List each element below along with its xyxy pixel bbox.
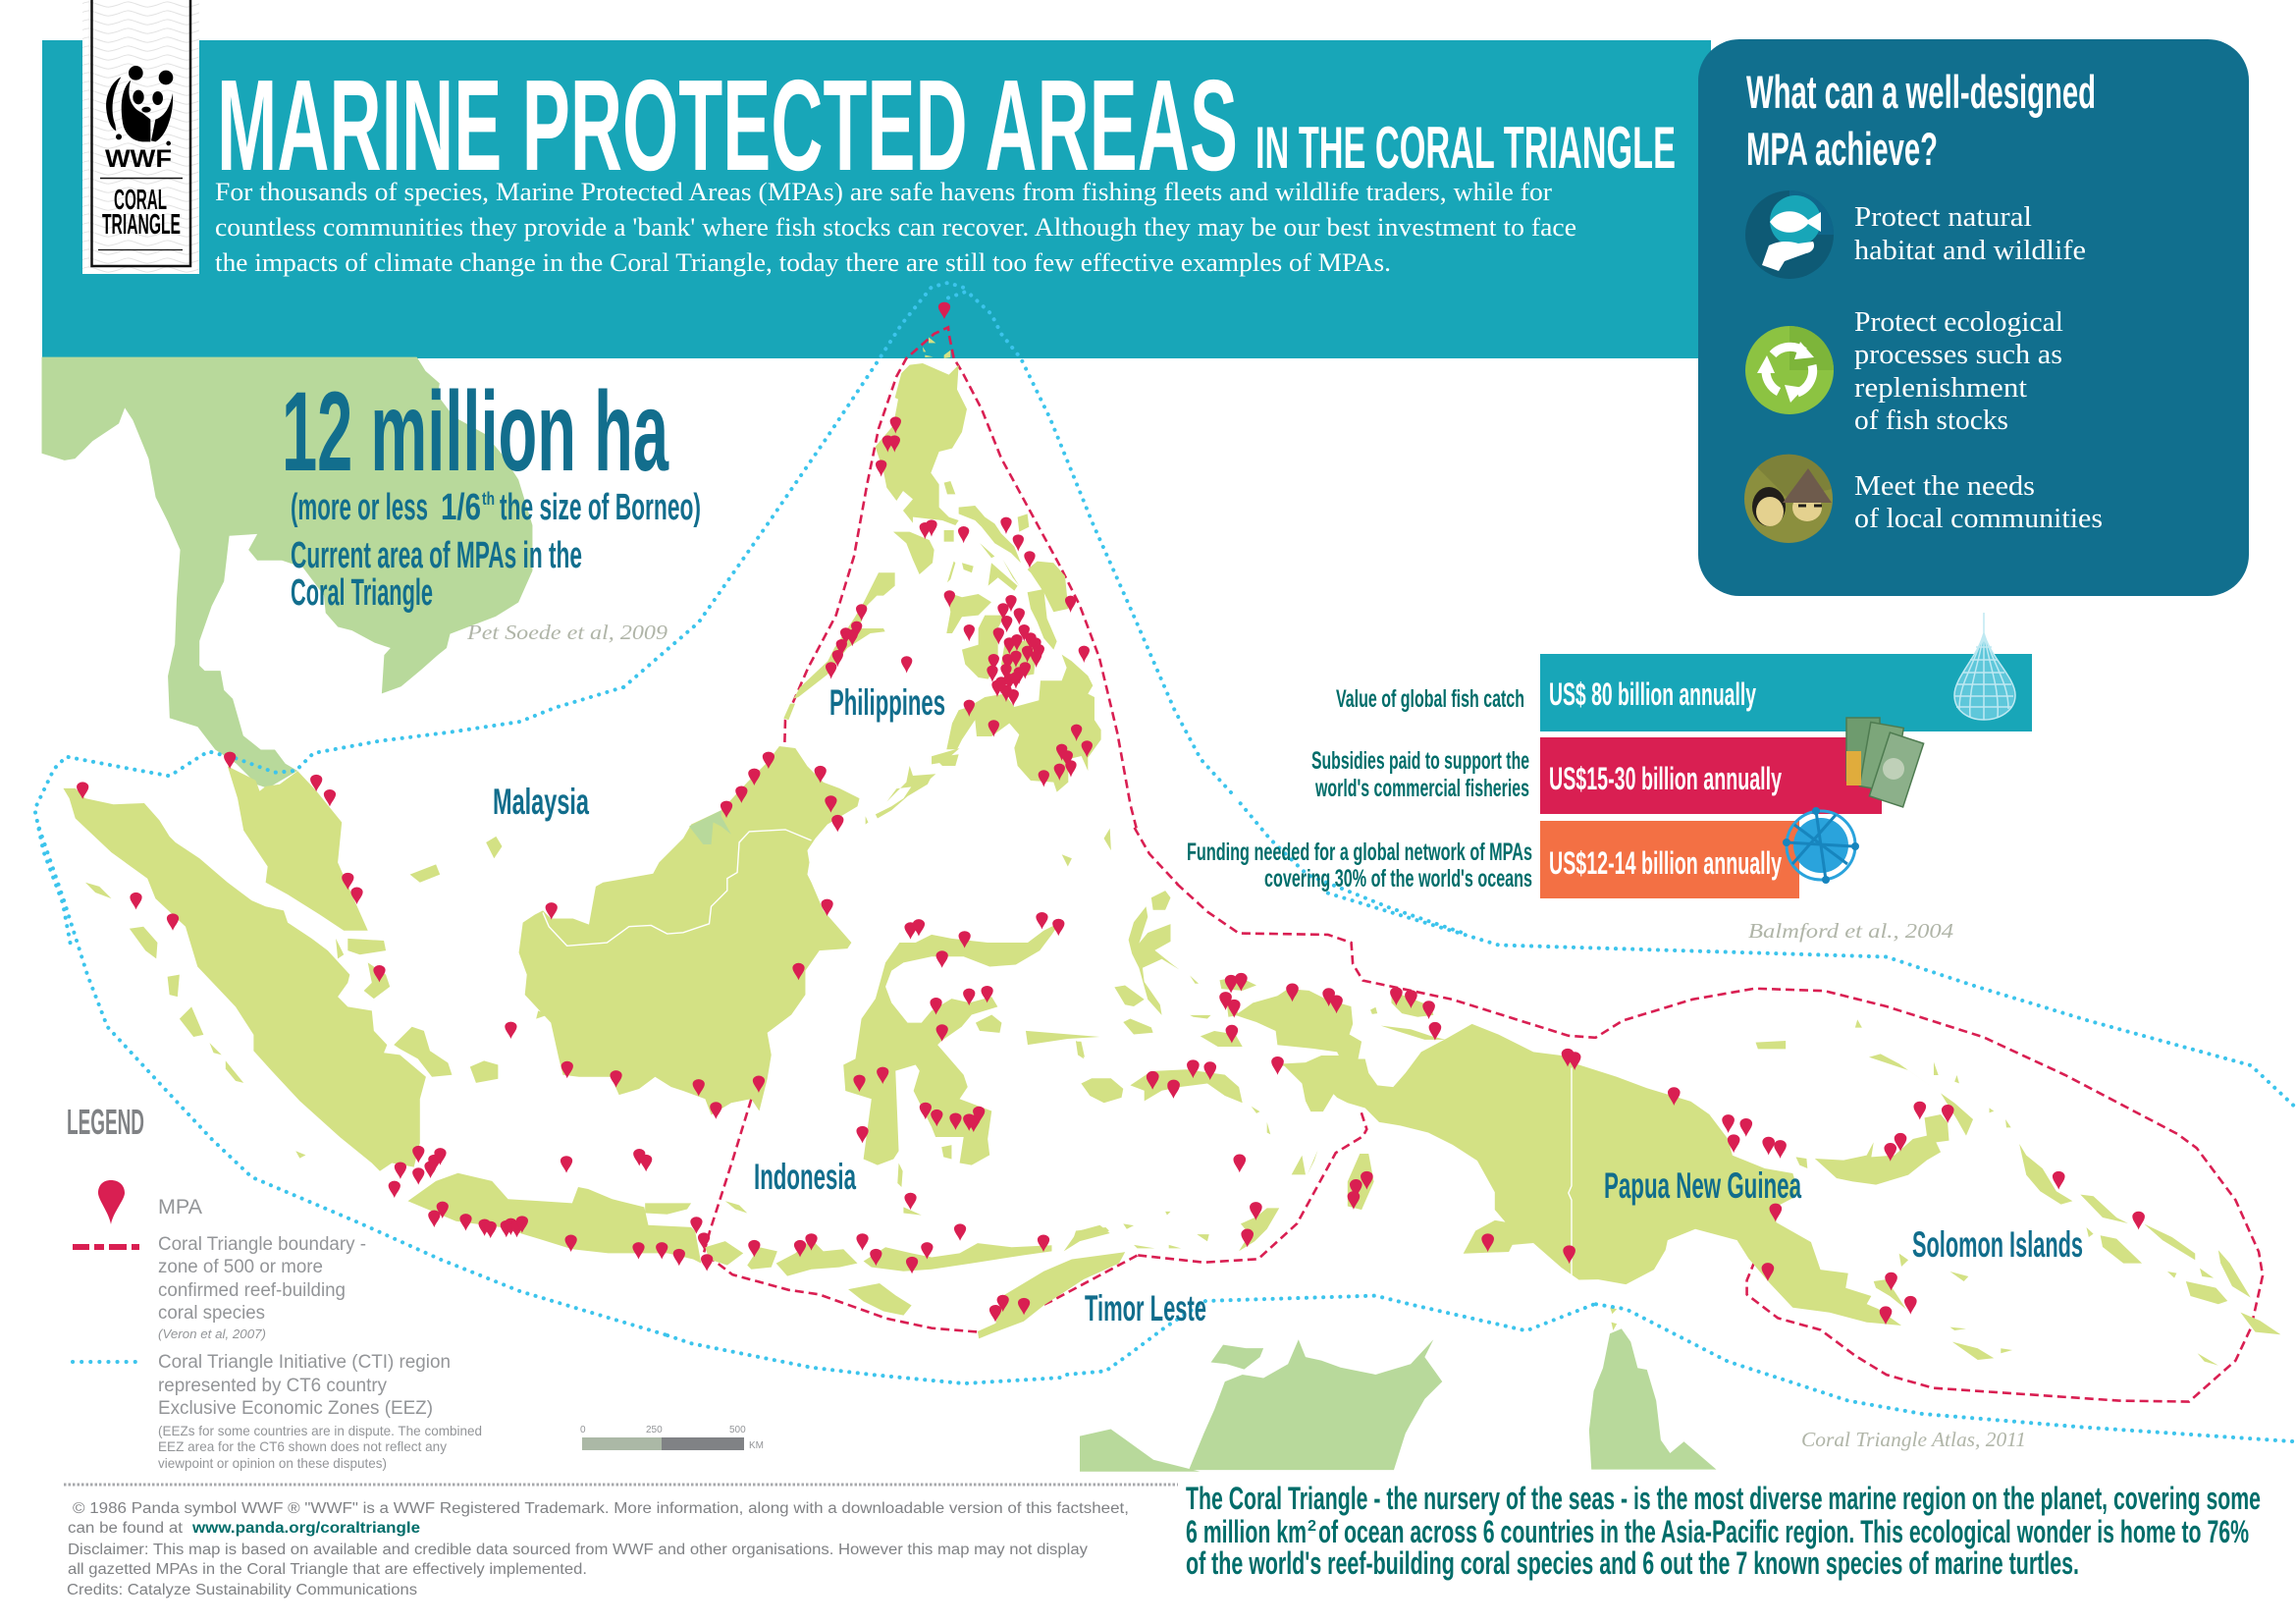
legend pin bbox=[98, 1180, 125, 1224]
text: protect ecological processes: Protect ecological bbox=[1854, 307, 2063, 338]
MPA location pins bbox=[77, 302, 2145, 1325]
legend text: Coral Triangle boundary bbox=[158, 1234, 366, 1341]
legend text: CTI region: (EEZs for some countries are in dispute. The combined bbox=[158, 1423, 482, 1438]
country labels: Papua New Guinea bbox=[1604, 1165, 1801, 1206]
country labels: Malaysia bbox=[493, 782, 589, 822]
scale bar: 500 bbox=[729, 1425, 746, 1435]
Coral Triangle boundary line bbox=[704, 327, 2263, 1402]
legend text: CTI region: EEZ area for the CT6 shown does not reflect any bbox=[158, 1438, 447, 1454]
bar values bbox=[1549, 677, 1782, 881]
bar values: US$15-30 billion annually bbox=[1549, 761, 1782, 796]
legend text: Coral Triangle boundary: (Veron et al, 2007) bbox=[158, 1326, 266, 1341]
text: protect habitat: Protect natural bbox=[1854, 202, 2032, 233]
statistic: 12 million ha: Current area of MPAs in the bbox=[291, 535, 582, 576]
title: IN THE CORAL TRIANGLE bbox=[1255, 115, 1676, 181]
icon: globe network bbox=[1783, 807, 1859, 884]
text: protect ecological processes: processes such as bbox=[1854, 340, 2062, 370]
scale bar: 250 bbox=[646, 1425, 663, 1435]
country labels bbox=[493, 682, 2083, 1328]
legend text: Coral Triangle boundary: confirmed reef-building bbox=[158, 1280, 346, 1301]
country labels: Indonesia bbox=[754, 1157, 856, 1197]
legend label: MPA: MPA bbox=[158, 1196, 202, 1218]
icon: replenishment cycle bbox=[1745, 326, 1834, 414]
source: Pet Soede: Pet Soede et al, 2009 bbox=[466, 621, 668, 644]
footer credits: all gazetted MPAs in the Coral Triangle that are effectively implemented. bbox=[68, 1561, 587, 1578]
closing statement bbox=[1186, 1481, 2261, 1581]
footer credits: © 1986 Panda symbol WWF ® "WWF" is a WWF Registered Trademark. More information, along with a downloadable version of this factsheet, bbox=[73, 1500, 1129, 1517]
text: Coral Triangle bbox=[102, 185, 181, 241]
map: Indonesia, Malaysia and Philippines islands bbox=[63, 337, 2280, 1366]
text: meet needs of communities: Meet the needs bbox=[1854, 471, 2035, 502]
legend text: Coral Triangle boundary: zone of 500 or more bbox=[158, 1257, 323, 1277]
statistic: 12 million ha bbox=[282, 369, 701, 614]
footer credits: can be found at bbox=[68, 1520, 184, 1537]
WWF Coral Triangle logo bbox=[82, 0, 199, 274]
legend bbox=[67, 1102, 482, 1471]
scale bar: 0 bbox=[580, 1425, 586, 1435]
bar values: US$ 80 billion annually bbox=[1549, 677, 1756, 712]
country labels: Timor Leste bbox=[1085, 1288, 1206, 1328]
source: Balmford: Balmford et al., 2004 bbox=[1748, 919, 1954, 943]
panel heading bbox=[1746, 66, 2096, 175]
title: MARINE PROTECTED AREAS bbox=[217, 53, 1238, 197]
intro paragraph: the impacts of climate change in the Coral Triangle, today there are still too few effective examples of MPAs. bbox=[215, 248, 1391, 277]
legend text: CTI region: represented by CT6 country bbox=[158, 1376, 387, 1396]
text: meet needs of communities: of local communities bbox=[1854, 504, 2103, 534]
bar labels: Subsidies paid to support the bbox=[1311, 747, 1529, 775]
text: protect habitat: habitat and wildlife bbox=[1854, 236, 2086, 266]
legend text: CTI region: Exclusive Economic Zones (EEZ) bbox=[158, 1398, 433, 1419]
legend text: CTI region bbox=[158, 1352, 482, 1471]
legend text: Coral Triangle boundary: coral species bbox=[158, 1303, 265, 1324]
text: protect ecological processes bbox=[1854, 307, 2063, 436]
text: protect habitat bbox=[1854, 202, 2086, 266]
bar: MPA funding bbox=[1540, 821, 1799, 898]
statistic: 12 million ha: (more or less bbox=[291, 487, 428, 528]
icon: hand holding fish bbox=[1745, 190, 1834, 279]
legend text: CTI region: viewpoint or opinion on these disputes) bbox=[158, 1455, 387, 1471]
bar labels: covering 30% of the world's oceans bbox=[1264, 865, 1532, 893]
statistic: 12 million ha: 12 million ha bbox=[282, 369, 669, 495]
bar: subsidies bbox=[1540, 737, 1882, 814]
closing statement: 2 bbox=[1308, 1518, 1316, 1535]
bar: global fish catch bbox=[1540, 654, 2032, 731]
map: Borneo land border bbox=[543, 830, 812, 946]
footer credits bbox=[67, 1500, 1129, 1598]
icon: fishing net bbox=[1954, 613, 2015, 720]
icon: money bbox=[1846, 718, 1924, 807]
text: WWF: WWF bbox=[105, 145, 172, 173]
bar labels bbox=[1187, 685, 1532, 893]
icon: local communities bbox=[1744, 455, 1833, 543]
legend dotted key bbox=[73, 1360, 142, 1364]
legend text: Coral Triangle boundary: Coral Triangle boundary - bbox=[158, 1234, 366, 1255]
footer credits: Credits: Catalyze Sustainability Communications bbox=[67, 1582, 417, 1598]
panel heading: What can a well-designed bbox=[1746, 66, 2096, 118]
header band bbox=[42, 40, 1711, 358]
source: Coral Triangle Atlas: Coral Triangle Atlas, 2011 bbox=[1801, 1428, 2026, 1451]
map: New Guinea land border bbox=[1569, 1068, 1572, 1275]
country labels: Solomon Islands bbox=[1912, 1224, 2083, 1265]
bar chart: funding comparison bbox=[1187, 613, 2032, 898]
bar labels: Funding needed for a global network of MPAs bbox=[1187, 839, 1532, 866]
footer credits: www.panda.org/coraltriangle bbox=[191, 1520, 420, 1537]
scale bar bbox=[580, 1425, 764, 1451]
country labels: Philippines bbox=[829, 682, 945, 723]
intro paragraph: For thousands of species, Marine Protected Areas (MPAs) are safe havens from fishing fleets and wildlife traders, while for bbox=[215, 178, 1552, 206]
statistic: 12 million ha: 1/6 bbox=[441, 487, 481, 528]
legend text: CTI region: Coral Triangle Initiative (CTI) region bbox=[158, 1352, 451, 1373]
map: mainland Asia and Australia bbox=[41, 357, 1716, 1472]
statistic: 12 million ha: Coral Triangle bbox=[291, 572, 433, 614]
panel heading: MPA achieve? bbox=[1746, 123, 1938, 175]
statistic: 12 million ha: th bbox=[482, 489, 495, 509]
text: Coral Triangle: CORAL bbox=[114, 185, 167, 216]
legend title: LEGEND bbox=[67, 1102, 144, 1142]
text: Coral Triangle: TRIANGLE bbox=[102, 209, 181, 241]
icon: panda bbox=[106, 66, 173, 145]
scale bar: KM bbox=[749, 1440, 764, 1451]
bar labels: world's commercial fisheries bbox=[1314, 775, 1529, 802]
statistic: 12 million ha: the size of Borneo) bbox=[500, 487, 701, 528]
text: protect ecological processes: replenishment bbox=[1854, 373, 2027, 404]
bar labels: Value of global fish catch bbox=[1336, 685, 1524, 713]
legend dashed key bbox=[73, 1244, 139, 1250]
panel: what a well-designed MPA can achieve bbox=[1698, 39, 2249, 596]
map: Brunei and Sabah tint bbox=[689, 810, 731, 844]
footer credits: Disclaimer: This map is based on available and credible data sourced from WWF and other organisations. However this map may not display bbox=[68, 1542, 1088, 1558]
intro paragraph: countless communities they provide a 'bank' where fish stocks can recover. Although they may be our best investment to face bbox=[215, 213, 1576, 242]
Coral Triangle Initiative region line bbox=[34, 283, 2296, 1441]
bar values: US$12-14 billion annually bbox=[1549, 845, 1782, 881]
text: meet needs of communities bbox=[1854, 471, 2103, 534]
intro paragraph bbox=[215, 178, 1576, 277]
text: protect ecological processes: of fish stocks bbox=[1854, 406, 2008, 436]
closing statement: 6 million km bbox=[1186, 1514, 1307, 1549]
